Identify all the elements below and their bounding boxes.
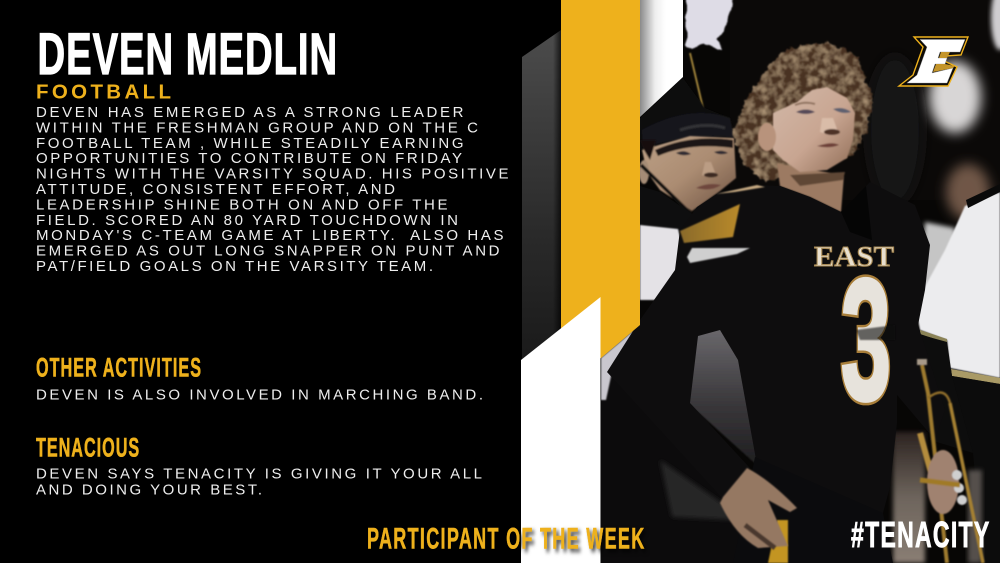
face and neck	[758, 87, 855, 212]
biography text block: DEVEN HAS EMERGED AS A STRONG LEADER	[36, 104, 464, 121]
sport label: FOOTBALL	[36, 80, 171, 104]
biography text block: FOOTBALL TEAM , WHILE STEADILY EARNING	[36, 135, 464, 152]
jersey lettering: EAST: EAST	[814, 242, 894, 273]
biography text block: NIGHTS WITH THE VARSITY SQUAD. HIS POSITIVE	[36, 166, 508, 183]
left band member: face	[639, 136, 736, 214]
biography text block: ATTITUDE, CONSISTENT EFFORT, AND	[36, 181, 395, 198]
player name heading: DEVEN MEDLIN	[38, 23, 337, 87]
biography text block: LEADERSHIP SHINE BOTH ON AND OFF THE	[36, 196, 448, 213]
gray angled stripe	[522, 30, 561, 400]
tenacious text: DEVEN SAYS TENACITY IS GIVING IT YOUR ALL	[36, 466, 482, 482]
other activities heading: OTHER ACTIVITIES	[36, 352, 201, 383]
biography text block: EMERGED AS OUT LONG SNAPPER ON PUNT AND	[36, 243, 500, 260]
biography text block: WITHIN THE FRESHMAN GROUP AND ON THE C	[36, 119, 478, 136]
left band member: hat	[642, 100, 733, 148]
white top stripe	[640, 0, 683, 117]
participant of the week label: PARTICIPANT OF THE WEEK	[367, 523, 644, 556]
gold stripe	[561, 0, 640, 390]
hand	[720, 468, 797, 548]
plume	[686, 0, 738, 108]
other activities text: DEVEN IS ALSO INVOLVED IN MARCHING BAND.	[36, 386, 483, 404]
jersey number 3: 3	[841, 244, 891, 436]
jersey number 3: 3	[841, 244, 891, 436]
biography text block: OPPORTUNITIES TO CONTRIBUTE ON FRIDAY	[36, 150, 462, 167]
biography text block: FIELD. SCORED AN 80 YARD TOUCHDOWN IN	[36, 212, 458, 229]
shadow beside gold stripe	[553, 0, 561, 400]
tenacious heading: TENACIOUS	[36, 432, 139, 463]
hair	[733, 42, 873, 183]
white lower stripe	[521, 297, 600, 563]
tenacious text	[36, 466, 482, 498]
biography text block: MONDAY'S C-TEAM GAME AT LIBERTY. ALSO HAS	[36, 227, 503, 244]
photo: marching band and football player	[601, 0, 1000, 563]
biography text block	[36, 104, 508, 275]
jersey number 3	[840, 274, 890, 406]
tenacious text: AND DOING YOUR BEST.	[36, 482, 262, 498]
background blurred band members	[863, 0, 1000, 288]
hashtag: #TENACITY	[851, 516, 989, 555]
left band member: white and dark uniform	[601, 186, 730, 522]
trumpet	[917, 359, 983, 563]
jersey	[607, 182, 945, 563]
white uniform on the right	[893, 184, 1000, 563]
gray coat between arm and torso	[690, 330, 756, 462]
icon: East E logo	[899, 37, 968, 86]
biography text block: PAT/FIELD GOALS ON THE VARSITY TEAM.	[36, 258, 433, 275]
